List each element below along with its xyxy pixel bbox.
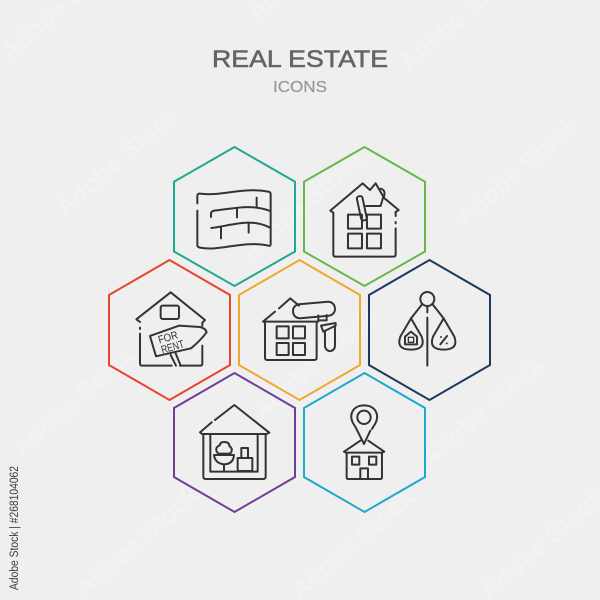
icon: house with interior furniture [200, 405, 269, 479]
hexagon: red [109, 260, 230, 400]
icon: house with roller brush [263, 298, 336, 360]
icon: house with for rent sign [136, 292, 207, 366]
text: Adobe Stock [451, 111, 584, 233]
text: Adobe Stock [236, 145, 369, 267]
sign text: FOR [157, 329, 179, 347]
text: Adobe Stock [8, 341, 141, 463]
hexagon: teal [174, 147, 295, 286]
text: Adobe Stock [416, 351, 549, 473]
icon: brick wall [197, 190, 271, 249]
stock id: Adobe Stock | #268104062 [9, 466, 21, 590]
icon: house with location pin [344, 405, 384, 479]
icon: balance scale [399, 292, 455, 366]
icon: house with for rent sign: RENT [160, 339, 186, 357]
hexagon: purple [174, 373, 295, 512]
hexagon: orange [239, 260, 360, 400]
title: REAL ESTATE [212, 46, 388, 73]
subtitle: ICONS [273, 79, 327, 96]
hexagon: navy [369, 260, 490, 400]
hexagon: blue [304, 373, 425, 512]
text: Adobe Stock [51, 100, 184, 222]
icon: house with paint roller [330, 183, 399, 257]
text: Adobe Stock [248, 303, 381, 425]
hexagon: green [304, 147, 425, 286]
text: Adobe Stock [71, 481, 204, 600]
